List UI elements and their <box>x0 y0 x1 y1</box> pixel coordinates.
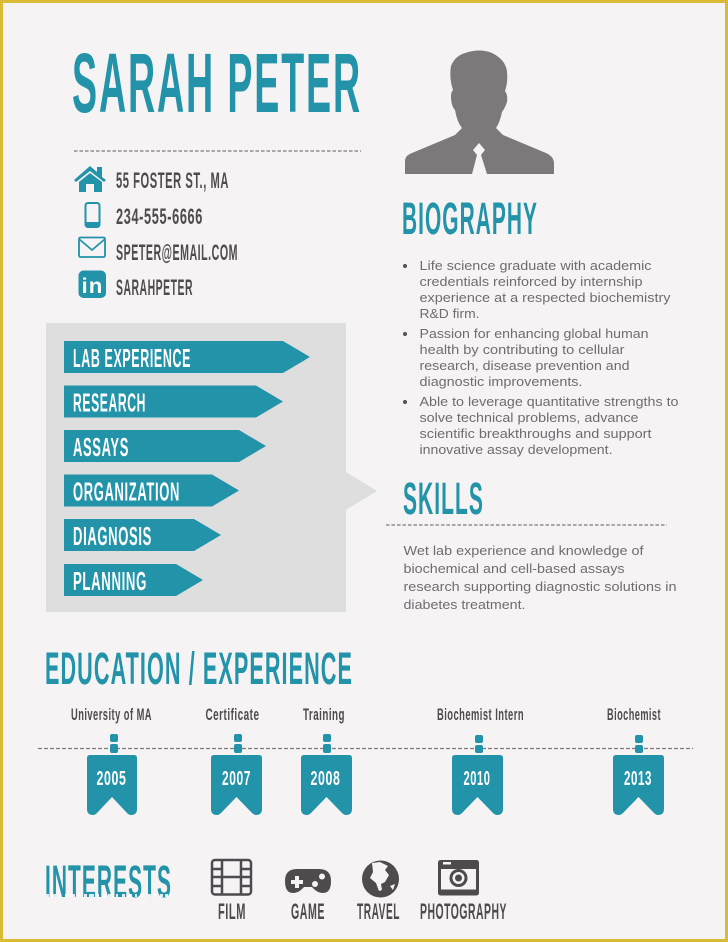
timeline item: 2010: 2010 <box>464 768 490 790</box>
text: biography bullets <box>403 258 678 457</box>
text: biography bullets: Life science graduate with academic <box>420 258 652 273</box>
icon: camera <box>438 860 479 896</box>
arrow: organization: ORGANIZATION <box>73 476 180 506</box>
text: biography bullets: credentials reinforced by internship <box>420 274 642 289</box>
timeline <box>38 705 693 815</box>
icon: game controller <box>285 869 331 893</box>
timeline item: 2005 <box>71 705 152 815</box>
text: skills paragraph: research supporting diagnostic solutions in <box>404 579 676 594</box>
icon: profile silhouette <box>405 50 554 174</box>
panel: skill arrows <box>46 323 377 612</box>
icon: linkedin: in <box>82 275 104 298</box>
text: biography bullets: health by contributing to cellular <box>420 342 625 357</box>
contact block <box>74 166 238 300</box>
label: film: FILM <box>218 899 246 924</box>
text: biography bullets: diagnostic improvements. <box>420 374 582 389</box>
timeline item: 2010: Biochemist Intern <box>437 705 524 724</box>
timeline item: 2010 <box>437 705 524 815</box>
text: biography bullets: Passion for enhancing global human <box>420 326 648 341</box>
timeline item: 2007 <box>206 705 262 815</box>
arrow: assays <box>64 430 266 462</box>
text: skills paragraph <box>404 543 676 612</box>
interests icons <box>212 860 507 924</box>
text: SARAH PETER <box>72 36 362 130</box>
arrow: planning: PLANNING <box>73 566 147 596</box>
timeline item: 2013 <box>607 705 664 815</box>
text: PHOTOGRAPHY <box>420 899 507 924</box>
interests icons: GAME <box>291 899 325 924</box>
arrow: lab experience: LAB EXPERIENCE <box>73 343 191 373</box>
timeline item: 2007: Certificate <box>206 705 260 724</box>
text: skills paragraph: biochemical and cell-based assays <box>404 561 625 576</box>
timeline item: 2005: University of MA <box>71 705 152 724</box>
icon: envelope <box>79 238 105 257</box>
timeline item: 2013: Biochemist <box>607 705 661 724</box>
timeline item: 2008: Training <box>303 705 345 724</box>
text: INTERESTS <box>45 856 172 907</box>
text: EDUCATION / EXPERIENCE <box>45 643 353 694</box>
text: biography bullets: solve technical problems, advance <box>420 410 638 425</box>
timeline item: 2007: 2007 <box>222 768 251 790</box>
text: address: 55 FOSTER ST., MA <box>116 168 229 193</box>
icon: linkedin <box>78 270 106 298</box>
text: biography bullets: experience at a respected biochemistry <box>420 290 671 305</box>
timeline item: 2013: 2013 <box>624 768 652 790</box>
icon: house <box>74 166 106 192</box>
text: BIOGRAPHY <box>402 193 538 244</box>
arrow: diagnosis: DIAGNOSIS <box>73 521 152 551</box>
timeline item: 2005: 2005 <box>96 768 126 790</box>
icon: globe <box>362 860 399 898</box>
text: skills paragraph: diabetes treatment. <box>404 597 526 612</box>
text: biography bullets: research, disease prevention and <box>420 358 630 373</box>
arrow: research: RESEARCH <box>73 388 146 418</box>
text: SPETER@EMAIL.COM <box>116 240 238 265</box>
text: biography bullets: Able to leverage quantitative strengths to <box>420 394 678 409</box>
text: SKILLS <box>403 473 484 524</box>
icon: film <box>212 860 251 894</box>
contact block: SARAHPETER <box>116 275 193 300</box>
timeline item: 2008 <box>301 705 352 815</box>
text: skills paragraph: Wet lab experience and knowledge of <box>404 543 644 558</box>
interests icons: TRAVEL <box>357 899 400 924</box>
timeline item: 2008: 2008 <box>310 768 340 790</box>
text: biography bullets: scientific breakthroughs and support <box>420 426 652 441</box>
text: biography bullets: innovative assay development. <box>420 442 612 457</box>
arrow: research <box>64 386 283 418</box>
text: biography bullets: R&D firm. <box>420 306 480 321</box>
icon: phone <box>85 203 100 227</box>
text: phone: 234-555-6666 <box>116 204 203 229</box>
arrow: assays: ASSAYS <box>73 432 129 462</box>
